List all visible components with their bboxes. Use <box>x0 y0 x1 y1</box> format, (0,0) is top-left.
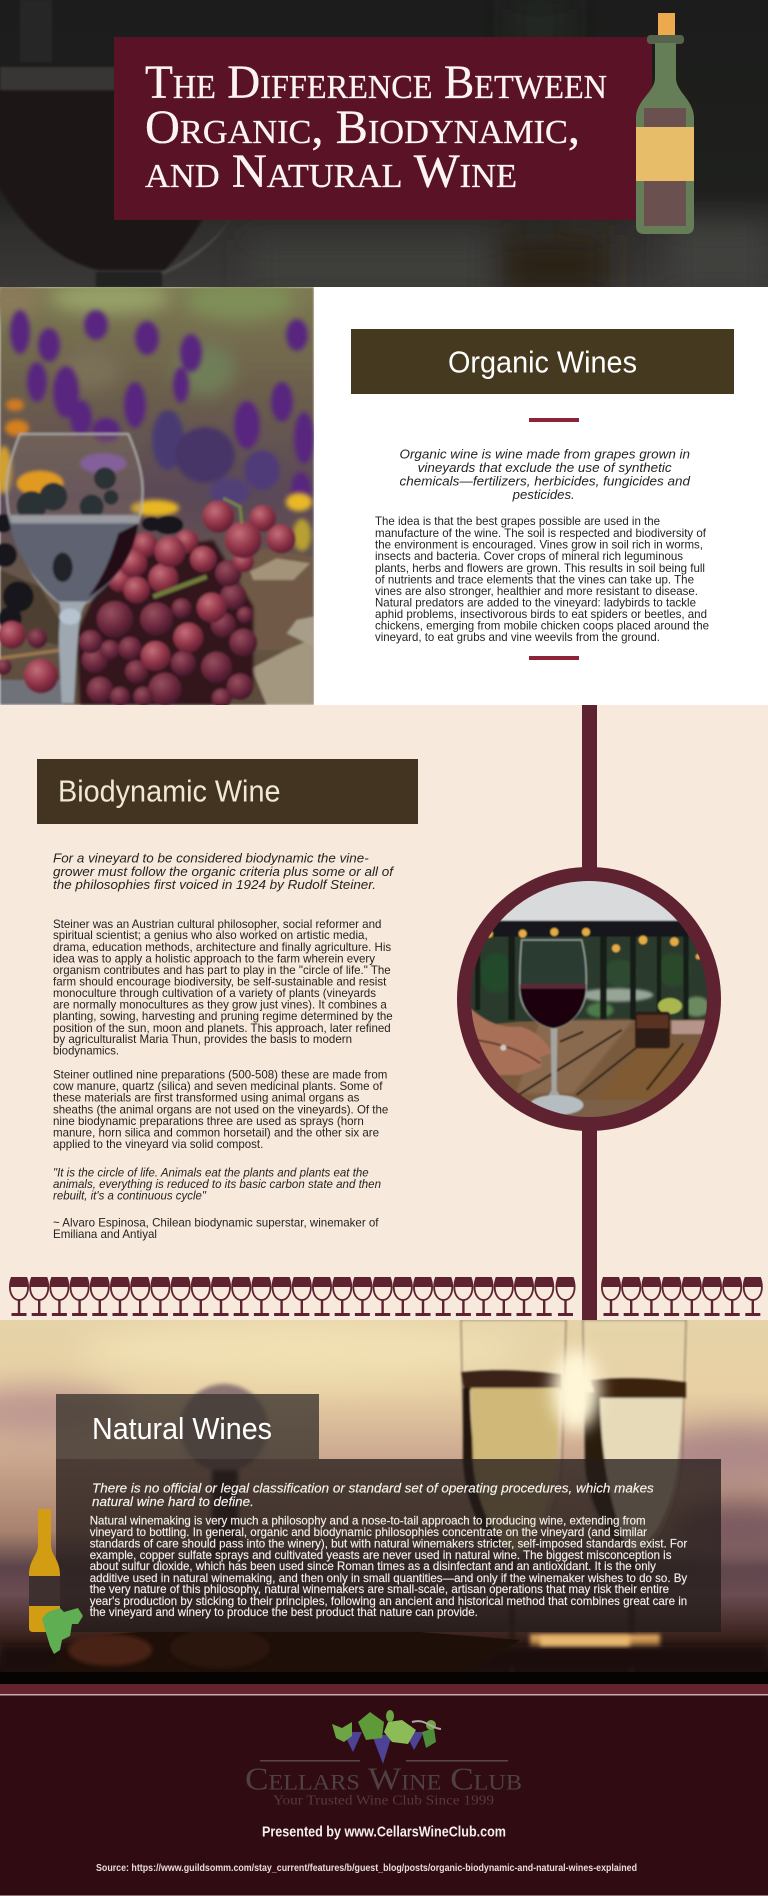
text: natural body: vineyard to bottling. In general, organic and biodynamic philosophies concentrate on the vineyard (and similar <box>90 1525 647 1539</box>
text: natural body: the very nature of this philosophy, natural winemakers are small-scale, artisan operations that may risk their entire <box>90 1582 670 1596</box>
wine glass <box>7 434 143 602</box>
photo: wine glass in circular frame <box>457 867 721 1131</box>
text: organic intro: vineyards that exclude the use of synthetic <box>418 460 672 475</box>
text: natural body: the vineyard and winery to produce the best product that nature can provide. <box>90 1605 478 1619</box>
distant wine glass <box>180 1384 268 1472</box>
text: attribution: Emiliana and Antiyal <box>53 1227 157 1241</box>
heading: Biodynamic Wine: Biodynamic Wine <box>58 774 280 809</box>
drink <box>635 1012 670 1048</box>
icon: green wine bottle <box>636 13 694 234</box>
text: organic body: the environment is encouraged. Vines grow in soil rich in worms, <box>375 538 703 552</box>
footer <box>0 1672 768 1896</box>
text: natural intro: There is no official or legal classification or standard set of operating procedures, which makes <box>92 1480 654 1496</box>
heading: Biodynamic Wine <box>37 759 418 824</box>
text: natural intro <box>92 1480 654 1509</box>
text: organic body: vines are also stronger, healthier and more resistant to disease. <box>375 584 698 598</box>
heading panel: Natural Wines: Natural Wines <box>92 1411 272 1446</box>
icon: yellow bottle <box>29 1509 60 1632</box>
title: Organic, Biodynamic, <box>145 101 580 154</box>
text: source: Source: https://www.guildsomm.com/stay_current/features/b/guest_blog/posts/organic-biodynamic-and-natural-wines-explained <box>96 1862 637 1874</box>
text: organic intro: chemicals—fertilizers, herbicides, fungicides and <box>400 474 691 488</box>
panel: biodynamic wine <box>0 705 768 1320</box>
logo: Cellars Wine Club <box>245 1710 522 1808</box>
text: organic body: The idea is that the best grapes possible are used in the <box>375 514 660 528</box>
text: attribution <box>53 1216 379 1241</box>
text: organic intro <box>400 446 691 502</box>
text: organic body: aphid problems, insectivorous birds to eat spiders or beetles, and <box>375 607 707 621</box>
hero background photo: wine glass <box>0 0 768 300</box>
text: biodynamic intro <box>53 850 394 892</box>
table <box>496 1018 706 1117</box>
text: biodynamic paragraph two: nine biodynamic preparations three are used as sprays (horn <box>53 1114 364 1128</box>
logo: Cellars Wine Club: Cellars Wine Club <box>245 1760 522 1796</box>
panel: natural wines <box>0 1320 768 1672</box>
heading: Organic Wines: Organic Wines <box>448 344 637 379</box>
text: biodynamic paragraph one: organism contributes and has part to play in the "circle of life." The <box>53 963 391 977</box>
text: biodynamic paragraph one <box>53 917 393 1058</box>
text: organic body: plants, herbs and flowers are grown. This results in soil being full <box>375 561 705 575</box>
stone <box>240 548 313 650</box>
tabletop <box>0 680 63 705</box>
text: biodynamic paragraph one: are normally monocultures as they grow just vines). It combines a <box>53 998 387 1012</box>
text: natural body <box>90 1514 687 1619</box>
text: organic body: Natural predators are added to the vineyard: ladybirds to tackle <box>375 596 696 610</box>
text: organic body <box>375 514 709 644</box>
text: biodynamic paragraph two: these materials are first transformed using animal organs as <box>53 1090 359 1104</box>
heading panel: Natural Wines <box>56 1394 319 1459</box>
photo: champagne flutes at sunset <box>0 1320 768 1672</box>
text: organic body: chickens, emerging from mobile chicken coops placed around the <box>375 618 709 632</box>
heading: Organic Wines <box>351 329 734 394</box>
text: biodynamic paragraph two <box>53 1068 389 1151</box>
text: biodynamic paragraph one: by agriculturalist Maria Thun, provides the basis to modern <box>53 1032 352 1046</box>
title <box>145 56 607 198</box>
text: presented by: Presented by www.CellarsWineClub.com <box>262 1824 506 1840</box>
text: biodynamic paragraph one: monoculture through cultivation of a variety of plants (vineyards <box>53 986 376 1000</box>
text: organic body: of nutrients and trace elements that the vines can take up. The <box>375 572 694 586</box>
text: biodynamic paragraph one: biodynamics. <box>53 1044 119 1058</box>
logo: Cellars Wine Club: Your Trusted Wine Club Since 1999 <box>273 1794 494 1808</box>
icon: grapes and vine leaves <box>332 1710 441 1764</box>
text: quote: "It is the circle of life. Animals eat the plants and plants eat the <box>53 1166 369 1180</box>
text: biodynamic paragraph one: Steiner was an Austrian cultural philosopher, social reformer and <box>53 917 381 931</box>
text: quote <box>53 1166 381 1202</box>
text: biodynamic intro: For a vineyard to be considered biodynamic the vine- <box>53 850 369 866</box>
text: biodynamic paragraph one: idea was to apply a holistic approach to the farm wherein every <box>53 952 375 966</box>
text: organic intro: Organic wine is wine made from grapes grown in <box>400 446 690 462</box>
text: natural body: standards of care should pass into the winery), but with natural winemakers stricter, self-imposed standards exist. For <box>90 1536 687 1550</box>
text: quote: rebuilt, it's a continuous cycle" <box>53 1188 207 1202</box>
text: biodynamic paragraph one: spiritual scientist; a genius who also worked on artistic media, <box>53 928 368 942</box>
text: natural body: Natural winemaking is very much a philosophy and a nose-to-tail approach to producing wine, extending from <box>90 1514 646 1528</box>
text: biodynamic paragraph two: manure, horn silica and common horsetail) and the other six are <box>53 1126 379 1140</box>
panel: hero header <box>0 0 768 300</box>
text: attribution: ~ Alvaro Espinosa, Chilean biodynamic superstar, winemaker of <box>53 1216 379 1230</box>
text: organic body: vineyard, to eat grubs and vine weevils from the ground. <box>375 630 660 644</box>
text: biodynamic paragraph two: applied to the vineyard via solid compost. <box>53 1137 263 1151</box>
dark grapes <box>0 514 183 630</box>
text: organic body: manufacture of the wine. The soil is respected and biodiversity of <box>375 526 707 540</box>
text: biodynamic paragraph two: Steiner outlined nine preparations (500-508) these are made from <box>53 1068 387 1082</box>
text: quote: animals, everything is reduced to its basic carbon state and then <box>53 1177 381 1191</box>
text: biodynamic paragraph one: drama, education methods, architecture and finally agriculture. His <box>53 940 391 954</box>
title panel <box>114 37 652 220</box>
text: natural intro: natural wine hard to define. <box>92 1494 254 1509</box>
hand <box>467 1005 552 1075</box>
text: natural body: example, copper sulfate sprays and cultivated yeasts are never used in natural wine. The biggest misconception is <box>90 1548 672 1562</box>
text: organic intro: pesticides. <box>512 487 575 502</box>
title: and Natural Wine <box>145 145 517 198</box>
text: biodynamic paragraph two: sheaths (the animal organs are not used on the vineyards). Of the <box>53 1102 389 1116</box>
text: biodynamic paragraph one: position of the sun, moon and planets. This approach, later refined <box>53 1021 391 1035</box>
text: biodynamic paragraph one: farm should encourage biodiversity, be self-sustainable and resist <box>53 974 387 988</box>
text: organic body: insects and bacteria. Cover crops of mineral rich leguminous <box>375 549 683 563</box>
panel: organic wines <box>0 280 768 708</box>
text: biodynamic intro: grower must follow the organic criteria plus some or all of <box>53 864 394 879</box>
text panel: natural wines body <box>56 1459 721 1632</box>
text: biodynamic paragraph two: cow manure, quartz (silica) and seven medicinal plants. Some of <box>53 1079 383 1093</box>
text: natural body: year's production by sticking to their principles, following an ancient and historical method that combines great care in <box>90 1594 687 1608</box>
text: biodynamic intro: the philosophies first voiced in 1924 by Rudolf Steiner. <box>53 877 376 892</box>
text: natural body: about sulfur dioxide, which has been used since Roman times as a disinfectant and an antioxidant. It is the only <box>90 1559 656 1573</box>
icon row: wine glasses <box>9 1277 763 1316</box>
glass <box>520 940 586 1028</box>
icon: green grapes <box>42 1608 83 1654</box>
title: The Difference Between <box>145 56 607 109</box>
text: biodynamic paragraph one: planting, sowing, harvesting and pruning regime determined by the <box>53 1009 393 1023</box>
photo: wine glass and red grapes <box>0 280 314 708</box>
text: natural body: additive used in natural winemaking, and then only in small quantities—and only if the winemaker wishes to do so. By <box>90 1571 687 1585</box>
flutes <box>461 1320 686 1672</box>
